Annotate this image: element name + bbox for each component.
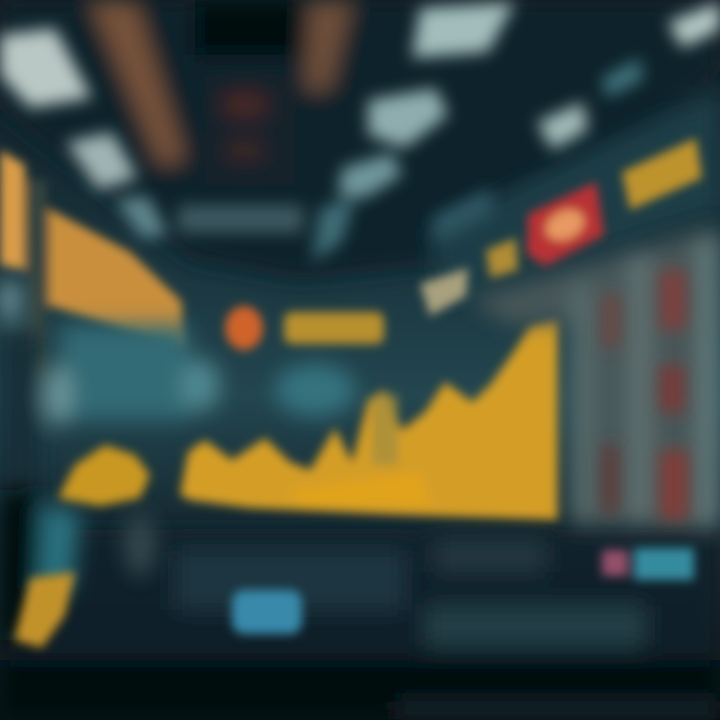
icon: yellow boot [14, 572, 75, 648]
left figure silhouette [0, 490, 155, 640]
right data wall [470, 225, 720, 530]
red data columns [602, 270, 688, 520]
blue monitor [232, 590, 302, 634]
yellow left mound chart [58, 445, 150, 506]
orange dot and yellow label [225, 306, 384, 350]
dark desks [0, 530, 720, 720]
red circle sign [527, 182, 604, 266]
ceiling structure [0, 0, 720, 300]
yellow area chart [180, 318, 558, 520]
small yellow signs [420, 238, 518, 316]
pink and blue bar [602, 548, 694, 580]
left teal screens [0, 282, 355, 510]
ceiling lights [0, 2, 720, 262]
left orange panels [0, 150, 182, 380]
yellow sign upper right [622, 138, 702, 210]
